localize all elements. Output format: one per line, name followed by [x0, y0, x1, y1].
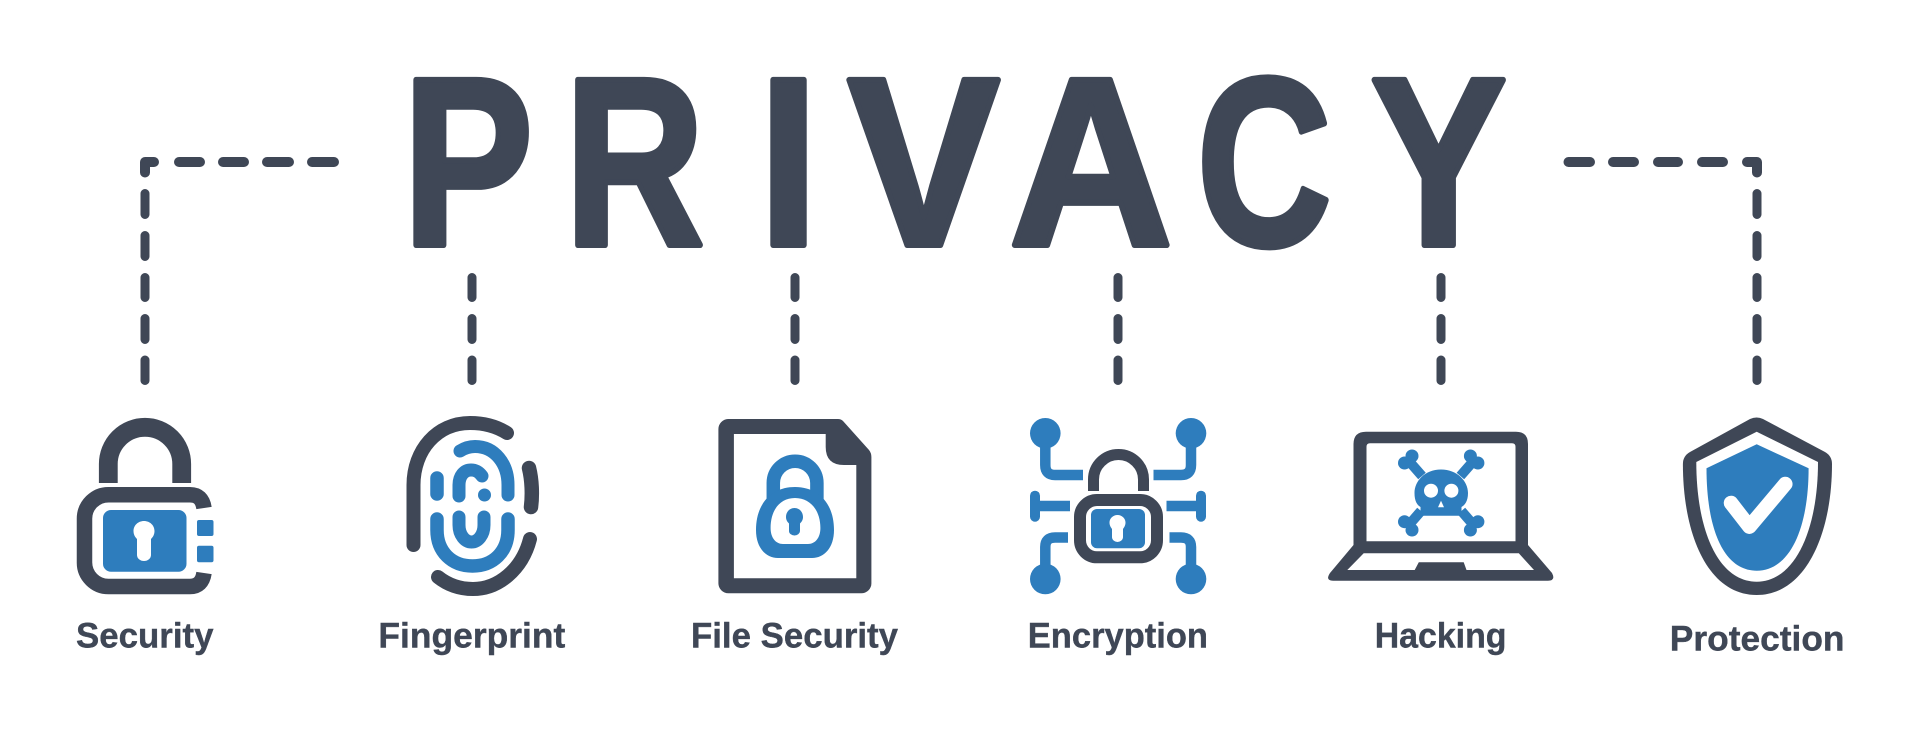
- title: [403, 27, 1507, 297]
- icon: padlock: [84, 427, 213, 587]
- label: File Security: [691, 617, 899, 656]
- connector: title to File Security: [790, 278, 800, 380]
- icon: fingerprint: [414, 423, 532, 589]
- panel: Hacking: [1328, 432, 1553, 656]
- connector: title to Protection: [1568, 162, 1757, 380]
- icon: laptop with skull: [1328, 432, 1553, 581]
- circuit lines: [1035, 440, 1201, 570]
- title: V: [848, 28, 1000, 296]
- icon: circuit lock: [1030, 418, 1206, 594]
- label: Protection: [1670, 620, 1844, 659]
- panel: Protection: [1670, 418, 1844, 659]
- title: P: [403, 29, 533, 297]
- label: Fingerprint: [378, 617, 566, 656]
- title: C: [1197, 27, 1331, 296]
- panel: File Security: [691, 419, 899, 656]
- title: I: [759, 29, 818, 297]
- panel: Encryption: [1028, 418, 1208, 656]
- title: R: [565, 29, 704, 297]
- connector: title to Hacking: [1436, 278, 1446, 380]
- icon: file with lock: [718, 419, 871, 593]
- panel: Security: [76, 427, 214, 656]
- label: Encryption: [1028, 617, 1208, 656]
- label: Security: [76, 617, 214, 656]
- panel: Fingerprint: [378, 423, 566, 656]
- icon: shield with check: [1683, 418, 1832, 595]
- connector: title to Encryption: [1114, 278, 1122, 380]
- label: Hacking: [1375, 617, 1506, 656]
- skull and crossbones: [1398, 450, 1484, 536]
- connector: title to Fingerprint: [468, 278, 476, 380]
- connector: title to Security: [145, 162, 334, 380]
- title: Y: [1371, 28, 1507, 297]
- title: A: [1009, 29, 1173, 296]
